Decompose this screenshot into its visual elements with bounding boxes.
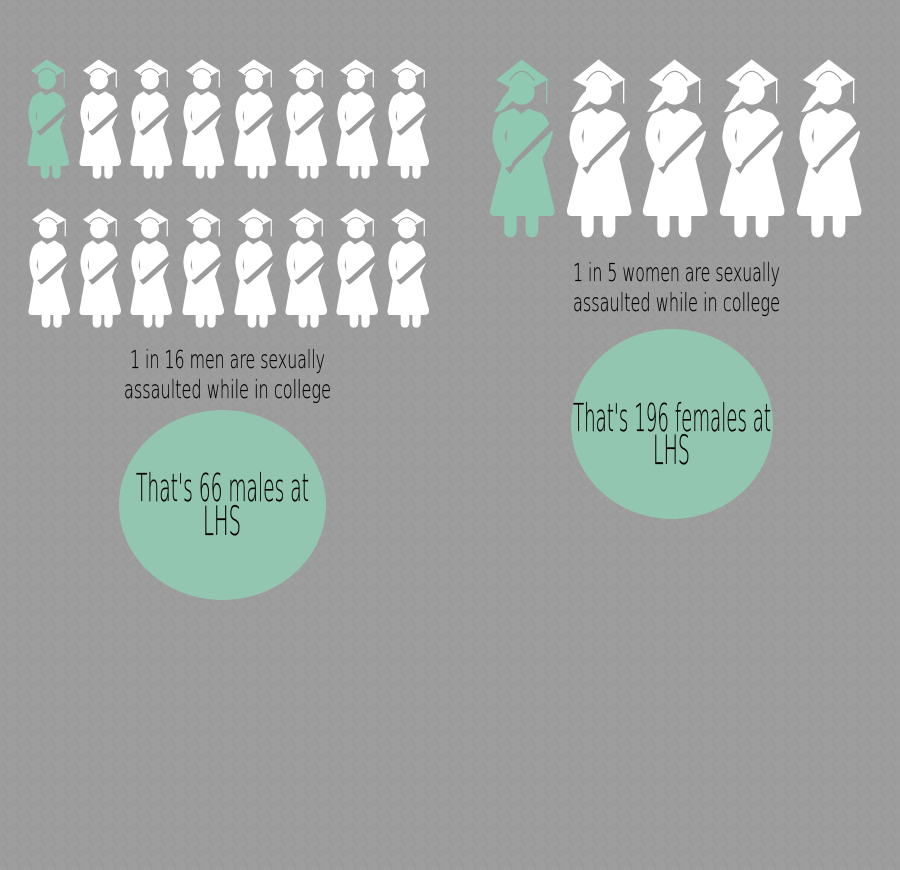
- circle callout: males at LHS: LHS: [203, 499, 241, 545]
- female figures: [490, 59, 861, 237]
- icon: male graduate 15: [336, 208, 378, 328]
- circle callout: females at LHS: [571, 329, 773, 519]
- male figures: first row: [27, 59, 429, 179]
- text: male statistic: [124, 345, 331, 404]
- icon: male graduate 5: [234, 59, 276, 179]
- text: male statistic: assaulted while in college: [124, 375, 331, 404]
- icon: male graduate 11: [130, 208, 172, 328]
- text: male statistic: 1 in 16 men are sexually: [130, 345, 325, 374]
- icon: male graduate 7: [336, 59, 378, 179]
- icon: female graduate 2: [567, 59, 631, 237]
- icon: female graduate 5: [797, 59, 861, 237]
- circle callout: males at LHS: [119, 410, 326, 600]
- icon: male graduate 4: [182, 59, 224, 179]
- text: female statistic: assaulted while in college: [573, 288, 780, 317]
- icon: male graduate 14: [285, 208, 327, 328]
- icon: male graduate 9: [28, 208, 70, 328]
- icon: male graduate 8: [387, 59, 429, 179]
- male figures: second row: [28, 208, 429, 328]
- circle callout: males at LHS: That's 66 males at: [136, 466, 309, 510]
- icon: highlighted female graduate: [490, 59, 554, 237]
- text: female statistic: 1 in 5 women are sexually: [573, 258, 780, 287]
- icon: male graduate 13: [234, 208, 276, 328]
- icon: male graduate 16: [387, 208, 429, 328]
- icon: male graduate 2: [79, 59, 121, 179]
- icon: highlighted male graduate: [27, 59, 69, 179]
- text: female statistic: [573, 258, 780, 317]
- icon: male graduate 12: [182, 208, 224, 328]
- icon: female graduate 4: [720, 59, 784, 237]
- icon: male graduate 3: [130, 59, 172, 179]
- circle callout: females at LHS: LHS: [653, 428, 690, 474]
- icon: female graduate 3: [643, 59, 707, 237]
- icon: male graduate 6: [285, 59, 327, 179]
- icon: male graduate 10: [79, 208, 121, 328]
